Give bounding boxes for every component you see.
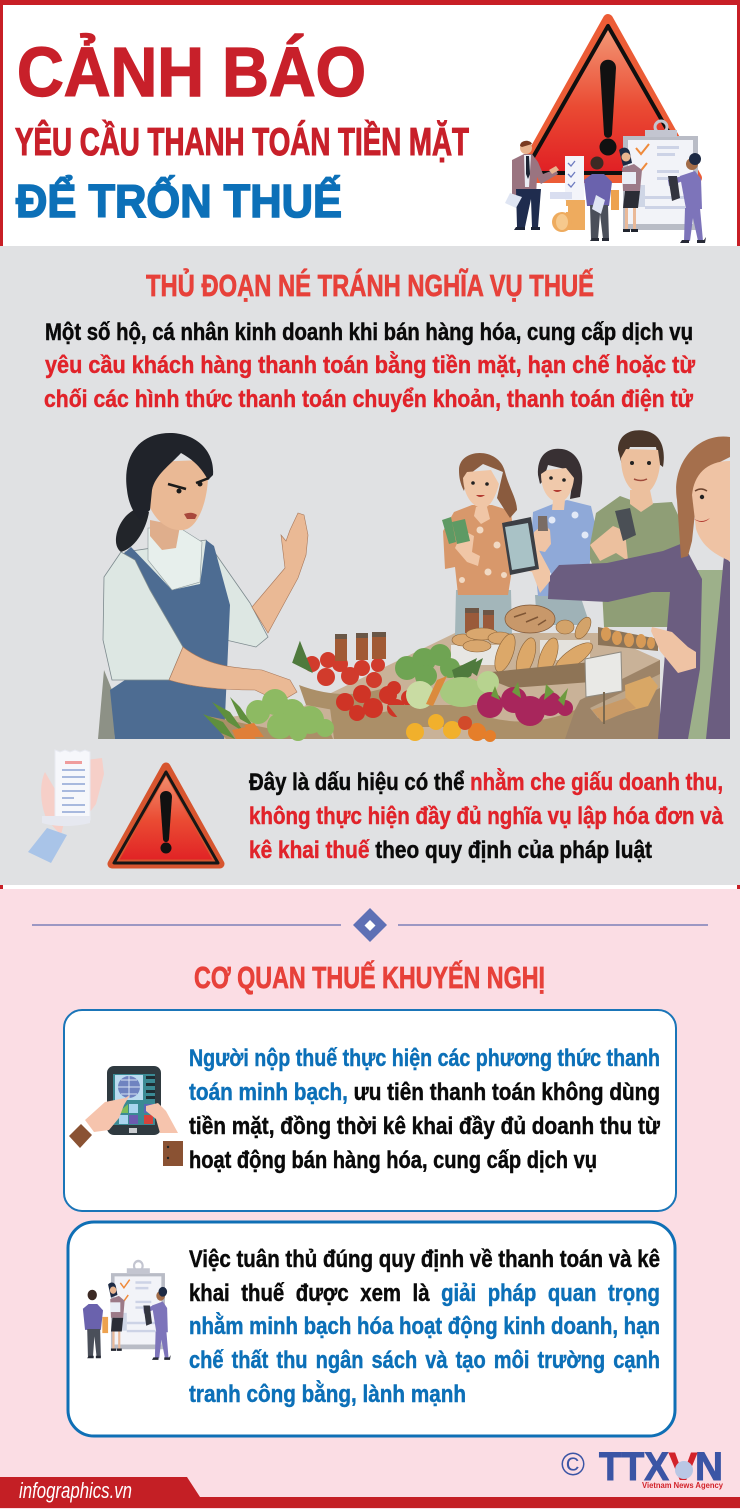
- card 2 text: [189, 1246, 660, 1408]
- card 2 text: nhằm minh bạch hóa hoạt động kinh doanh, hạn: [189, 1312, 660, 1340]
- illustration: bread and jars: [451, 605, 658, 722]
- illustration: vendor refusing with raised hand: [98, 433, 308, 739]
- card 2 text: khai thuế được xem là giải pháp quan trọng: [189, 1280, 660, 1307]
- icon: hands on tablet: [69, 1066, 183, 1166]
- illustration: customer man in green shirt: [590, 430, 686, 627]
- copyright mark and TTXVN logo: V: [668, 1445, 698, 1489]
- title: [15, 33, 469, 227]
- intro text block: [44, 319, 695, 413]
- illustration: smartphone and hand: [502, 517, 550, 593]
- card 2 text: Việc tuân thủ đúng quy định về thanh toán và kê: [189, 1246, 660, 1273]
- panel: recommendation card 1: [64, 1010, 676, 1211]
- title: ĐỂ TRỐN THUẾ: [16, 175, 342, 227]
- card 1 text: hoạt động bán hàng hóa, cung cấp dịch vụ: [189, 1147, 597, 1174]
- illustration: customer woman with cash: [442, 453, 517, 635]
- warning block: hand with receipt: [28, 750, 104, 863]
- icon: people with clipboard: [83, 1261, 171, 1360]
- card 2 text: chế thất thu ngân sách và tạo môi trường cạnh: [189, 1347, 660, 1374]
- illustration: customer woman in purple cardigan: [548, 436, 730, 739]
- illustration: table surface: [190, 633, 660, 739]
- header illustration: warning triangle with people and tax forms: [505, 19, 706, 243]
- warning block: warning triangle icon: [112, 767, 220, 864]
- warning block: text: kê khai thuế theo quy định của pháp luật: [249, 837, 652, 864]
- card 1 text: toán minh bạch, ưu tiên thanh toán không dùng: [189, 1079, 660, 1106]
- illustration: blank price sign: [585, 652, 622, 724]
- title: CẢNH BÁO: [17, 33, 366, 111]
- divider with diamond: [32, 908, 708, 942]
- warning block: text: [249, 768, 723, 864]
- title: YÊU CẦU THANH TOÁN TIỀN MẶT: [15, 120, 469, 164]
- section heading: recommendation: CƠ QUAN THUẾ KHUYẾN NGHỊ: [194, 960, 545, 995]
- footer band: infographics.vn: [19, 1478, 132, 1503]
- copyright mark and TTXVN logo: [561, 1445, 723, 1490]
- card 2 text: tranh công bằng, lành mạnh: [189, 1380, 466, 1408]
- card 1 text: [189, 1045, 661, 1174]
- copyright mark and TTXVN logo: N: [695, 1445, 723, 1489]
- copyright mark and TTXVN logo: Vietnam News Agency: [642, 1480, 723, 1490]
- market illustration: [98, 430, 730, 742]
- card 1 text: tiền mặt, đồng thời kê khai đầy đủ doanh thu từ: [189, 1113, 661, 1140]
- illustration: baskets of produce: [203, 632, 575, 742]
- footer band: [0, 1477, 740, 1508]
- panel: recommendation card 2: [68, 1222, 675, 1436]
- copyright mark and TTXVN logo: ©: [561, 1446, 585, 1482]
- copyright mark and TTXVN logo: TTX: [599, 1445, 669, 1489]
- section heading: tactics: THỦ ĐOẠN NÉ TRÁNH NGHĨA VỤ THUẾ: [146, 267, 594, 303]
- illustration: customer woman in blue shirt: [531, 449, 596, 625]
